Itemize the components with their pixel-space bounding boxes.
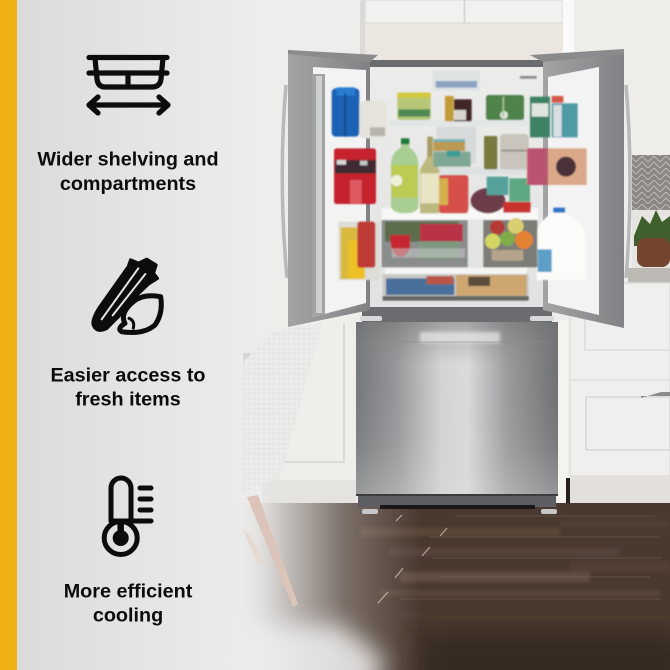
yellow accent bar [0, 0, 17, 670]
right crisper with fruit [483, 218, 537, 267]
icon: celery and produce [93, 259, 161, 332]
icon: shelves with width arrow [89, 58, 168, 113]
photo: dining chair [243, 323, 322, 607]
cans [487, 177, 531, 213]
fridge shelves [382, 70, 538, 274]
right door top bin [530, 96, 578, 137]
food and shelves [332, 70, 587, 301]
egg carton [500, 134, 529, 169]
heading line: compartments: compartments [60, 173, 196, 195]
storage containers [433, 139, 471, 167]
panel: wider shelving [37, 58, 219, 195]
icon: thermometer [104, 478, 151, 554]
heading line: cooling: cooling [93, 604, 163, 626]
right door lower bin [527, 148, 587, 185]
photo: refrigerator [282, 49, 630, 514]
left door bin [338, 222, 380, 280]
bottom drawer [383, 274, 529, 301]
wine bottle [420, 137, 439, 213]
left fade panel [17, 0, 277, 670]
photo: wood floor [220, 503, 670, 670]
heading: more efficient: More efficient [64, 580, 193, 602]
blue and white bottles [332, 87, 387, 138]
heading line: fresh items: fresh items [75, 388, 181, 410]
juice pitcher [439, 175, 468, 213]
freezer drawer [356, 322, 558, 514]
red sports drinks [334, 148, 376, 204]
panel: efficient cooling [64, 478, 193, 626]
top shelf green container [397, 93, 431, 120]
left crisper [382, 220, 468, 267]
jars [445, 96, 472, 121]
salad container [486, 95, 524, 120]
milk jug [537, 208, 586, 280]
pickle jar [484, 136, 497, 169]
heading: wider shelving: Wider shelving and [37, 148, 219, 170]
panel: fresh items [50, 259, 206, 410]
green soda bottle [391, 138, 418, 213]
left door [288, 50, 378, 327]
fridge cabinet [360, 60, 554, 322]
right door [530, 49, 624, 328]
grapes [471, 188, 505, 213]
refrigerator handles [282, 85, 630, 278]
heading: easier access: Easier access to [50, 364, 206, 386]
